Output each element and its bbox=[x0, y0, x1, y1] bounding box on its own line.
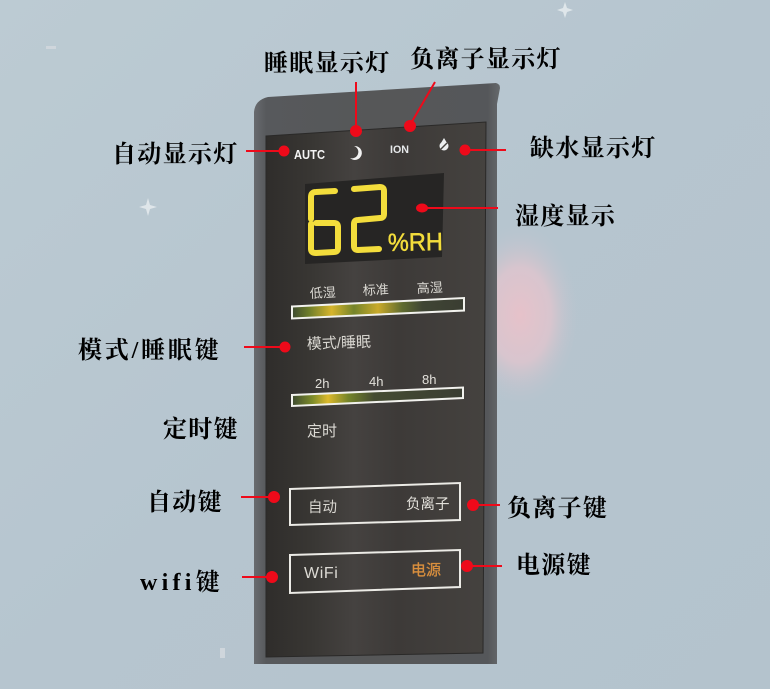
humidity level labels bbox=[309, 280, 443, 301]
label: sleep light: 睡眠显示灯 bbox=[264, 50, 390, 77]
label: mode/sleep key: 模式/睡眠键 bbox=[78, 337, 220, 364]
label: auto key: 自动键 bbox=[147, 489, 223, 516]
digits 62 bbox=[311, 187, 384, 253]
auto and anion button: 自动 bbox=[308, 499, 337, 516]
icon: water drop bbox=[440, 138, 448, 150]
auto and anion button: 负离子 bbox=[406, 496, 450, 513]
timer labels: 8h bbox=[422, 372, 436, 387]
mode/sleep key label: 模式/睡眠 bbox=[307, 334, 371, 353]
timer labels bbox=[315, 372, 436, 391]
device screen panel bbox=[266, 122, 486, 657]
label: auto light: 自动显示灯 bbox=[112, 141, 238, 168]
timer bar bbox=[292, 388, 463, 406]
humidity level labels: 低湿 bbox=[309, 285, 336, 301]
timer key label: 定时 bbox=[307, 423, 337, 440]
device body bbox=[254, 83, 500, 664]
timer labels: 2h bbox=[315, 376, 329, 391]
wifi and power button: WiFi bbox=[304, 565, 338, 582]
label: water shortage light: 缺水显示灯 bbox=[530, 135, 656, 162]
timer labels: 4h bbox=[369, 374, 383, 389]
label: humidity display: 湿度显示 bbox=[515, 202, 617, 230]
callout lines bbox=[241, 82, 506, 582]
%RH label: %RH bbox=[388, 228, 443, 257]
label: timer key: 定时键 bbox=[163, 416, 239, 443]
label: power key: 电源键 bbox=[516, 552, 592, 579]
humidity level bar bbox=[292, 298, 464, 318]
label: anion key: 负离子键 bbox=[507, 494, 608, 522]
icon: sleep moon bbox=[350, 146, 362, 160]
label: wifi key: wifi键 bbox=[140, 569, 221, 596]
humidity level labels: 高湿 bbox=[416, 280, 443, 296]
wifi and power button bbox=[290, 550, 460, 593]
indicator label: ION: ION bbox=[390, 144, 409, 156]
indicator label: AUTO: AUTC bbox=[294, 148, 325, 162]
auto and anion button bbox=[290, 483, 460, 525]
humidity display bbox=[305, 173, 444, 264]
humidity level labels: 标准 bbox=[362, 282, 389, 298]
label: anion light: 负离子显示灯 bbox=[410, 45, 562, 73]
wifi and power button: 电源 bbox=[411, 562, 441, 579]
